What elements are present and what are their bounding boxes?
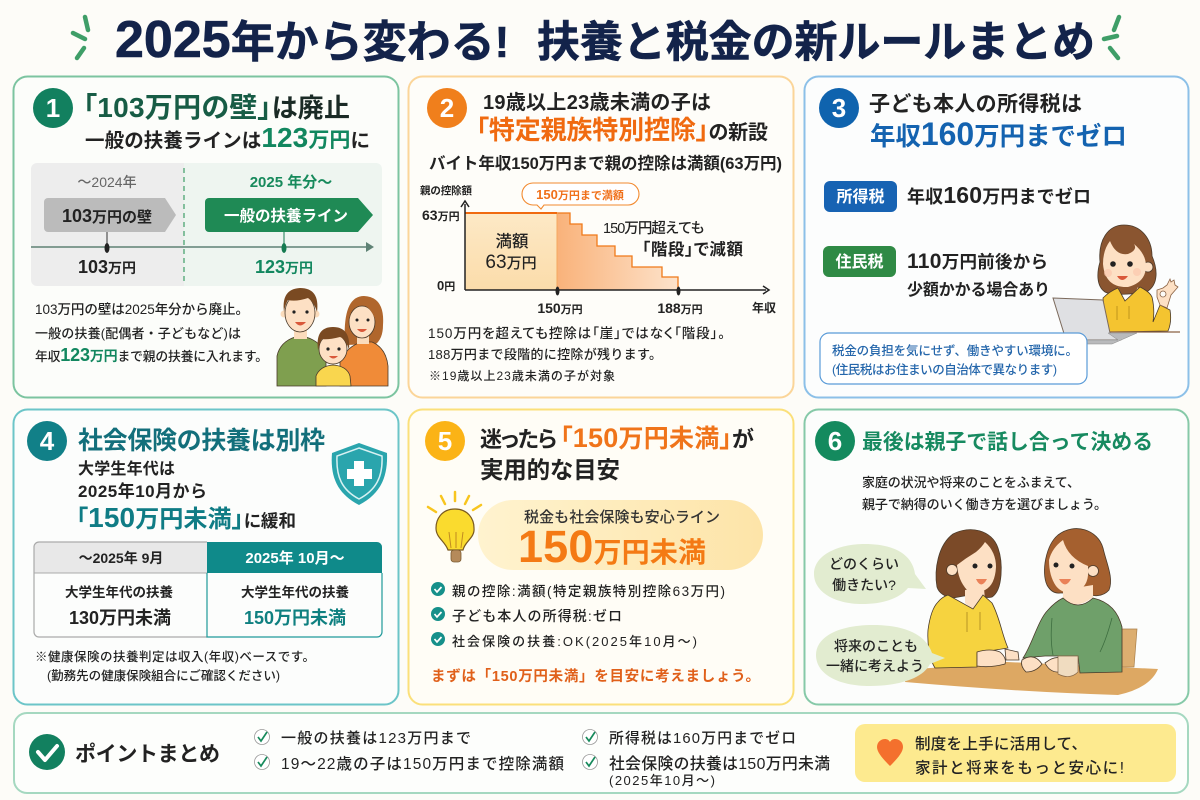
icon: light bulb bbox=[428, 492, 481, 562]
badge 2 bbox=[427, 88, 467, 128]
note box 3 bbox=[820, 333, 1087, 384]
summary list left: 一般の扶養は123万円まで bbox=[281, 730, 471, 747]
conclusion 5: まずは「150万円未満」を目安に考えましょう。 bbox=[431, 667, 760, 685]
step chart bbox=[420, 183, 776, 316]
summary list right: (2025年10月〜) bbox=[609, 773, 715, 788]
pill: 住民税 bbox=[823, 246, 896, 277]
subheading 2: 「特定親族特別控除」の新設 bbox=[476, 115, 768, 145]
heading 2: 19歳以上23歳未満の子は bbox=[483, 91, 711, 114]
checklist: 子ども本人の所得税:ゼロ bbox=[452, 608, 622, 624]
step chart: 63万円 bbox=[422, 207, 460, 223]
title: 2025年から変わる! bbox=[115, 11, 509, 69]
subheading 4: 「150万円未満」に緩和 bbox=[76, 502, 296, 533]
icon: check badge bbox=[29, 734, 65, 770]
comparison table: 2025年 10月〜 bbox=[245, 549, 345, 567]
body text 6: 親子で納得のいく働き方を選びましょう。 bbox=[862, 497, 1107, 512]
panel 4: 社会保険 bbox=[14, 410, 398, 704]
subheading 3: 年収160万円までゼロ bbox=[870, 116, 1127, 152]
comparison table bbox=[34, 542, 382, 637]
note box 3: (住民税はお住まいの自治体で異なります) bbox=[832, 362, 1057, 377]
heading 1: 「103万円の壁」は廃止 bbox=[83, 92, 350, 123]
comparison table: 130万円未満 bbox=[69, 608, 171, 628]
body text 1: 103万円の壁は2025年分から廃止。 bbox=[35, 301, 249, 317]
panel 6: 親子で話し合う bbox=[804, 410, 1188, 704]
badge 3: 3 bbox=[832, 93, 846, 123]
badge 2: 2 bbox=[440, 93, 454, 123]
summary list right bbox=[582, 730, 830, 788]
badge 1 bbox=[33, 88, 73, 128]
heading 5: 迷ったら bbox=[480, 427, 557, 452]
checklist: 親の控除:満額(特定親族特別控除63万円) bbox=[452, 583, 725, 599]
subheading 4: 大学生年代は bbox=[78, 459, 175, 478]
title: 扶養と税金の新ルールまとめ bbox=[537, 19, 1095, 67]
callout: message: 家計と将来をもっと安心に! bbox=[915, 759, 1124, 777]
body text 6: 家庭の状況や将来のことをふまえて、 bbox=[862, 475, 1080, 490]
body text 1: 一般の扶養(配偶者・子どもなど)は bbox=[35, 326, 241, 341]
text: 住民税: 110万円前後から bbox=[907, 250, 1048, 273]
callout: message bbox=[855, 724, 1176, 782]
timeline chart: 2025 年分〜 bbox=[250, 173, 332, 191]
step chart: 0円 bbox=[437, 278, 455, 293]
lead text 2: バイト年収150万円まで親の控除は満額(63万円) bbox=[429, 153, 782, 173]
arrow: 103万円の壁 bbox=[44, 198, 176, 232]
summary list right: 所得税は160万円までゼロ bbox=[609, 730, 796, 747]
step chart: 150万円超えても bbox=[603, 220, 705, 237]
summary list right: 社会保険の扶養は150万円未満 bbox=[609, 755, 830, 773]
subheading 4: 2025年10月から bbox=[78, 481, 207, 501]
step chart: 親の控除額 bbox=[420, 184, 472, 197]
arrow: 一般の扶養ライン: 一般の扶養ライン bbox=[224, 206, 348, 225]
step chart: 188万円 bbox=[657, 300, 703, 316]
timeline chart bbox=[31, 163, 382, 286]
step chart: 満額 bbox=[496, 232, 529, 251]
speech bubble: 将来のことも bbox=[816, 625, 945, 686]
callout: message: 制度を上手に活用して、 bbox=[915, 735, 1087, 753]
summary list left bbox=[254, 730, 564, 773]
note 4 bbox=[35, 649, 315, 683]
speech bubble: どのくらい bbox=[814, 544, 926, 604]
panel 3: 所得税 bbox=[804, 76, 1188, 398]
comparison table: 〜2025年 9月 bbox=[79, 550, 163, 566]
illustration: parent and child talking bbox=[905, 529, 1158, 695]
heading 5: が bbox=[732, 427, 754, 452]
icon: heart bbox=[877, 739, 903, 766]
heading 3: 子ども本人の所得税は bbox=[869, 93, 1082, 116]
text: 住民税: 少額かかる場合あり bbox=[907, 281, 1050, 299]
highlight pill bbox=[478, 500, 763, 572]
body text 6 bbox=[862, 475, 1107, 512]
highlight pill: 税金も社会保険も安心ライン bbox=[524, 509, 720, 526]
step chart: 150万円 bbox=[537, 300, 583, 316]
badge 6: 6 bbox=[828, 426, 842, 456]
speech bubble: どのくらい: 働きたい? bbox=[832, 577, 896, 593]
callout: 150万円まで満額 bbox=[522, 183, 639, 209]
note 4: ※健康保険の扶養判定は収入(年収)ベースです。 bbox=[35, 649, 315, 664]
summary list left: 19〜22歳の子は150万円まで控除満額 bbox=[281, 755, 564, 773]
body text 1: 年収123万円まで親の扶養に入れます。 bbox=[35, 345, 268, 365]
comparison table: 大学生年代の扶養 bbox=[241, 584, 349, 600]
pill: 所得税 bbox=[824, 181, 897, 212]
badge 4 bbox=[27, 421, 67, 461]
panel: ポイントまとめ bbox=[14, 713, 1188, 793]
step chart: 年収 bbox=[752, 300, 776, 315]
heading 5 bbox=[480, 423, 754, 483]
comparison table: 大学生年代の扶養 bbox=[65, 584, 173, 600]
body text 1 bbox=[35, 301, 268, 365]
step chart: 「階段」で減額 bbox=[642, 240, 744, 259]
panel 5: 150万円未満 bbox=[408, 410, 794, 704]
timeline chart: 〜2024年 bbox=[77, 174, 137, 190]
heading 5: 「150万円未満」 bbox=[560, 423, 732, 453]
heading 6: 最後は親子で話し合って決める bbox=[862, 431, 1153, 454]
subheading 4 bbox=[76, 459, 296, 533]
speech bubble: 将来のことも: 一緒に考えよう bbox=[826, 658, 924, 674]
icon: shield bbox=[332, 443, 387, 505]
arrow: 一般の扶養ライン bbox=[205, 198, 373, 232]
arrow: 103万円の壁: 103万円の壁 bbox=[62, 206, 152, 226]
body text 2: 188万円まで段階的に控除が残ります。 bbox=[428, 347, 662, 362]
body text 2 bbox=[428, 326, 725, 383]
timeline chart: 123万円 bbox=[255, 257, 313, 277]
heading 4: 社会保険の扶養は別枠 bbox=[78, 427, 325, 455]
speech bubble: どのくらい: どのくらい bbox=[829, 556, 899, 572]
illustration: family bbox=[277, 288, 388, 386]
highlight pill: 150万円未満 bbox=[518, 521, 706, 572]
callout: 150万円まで満額: 150万円まで満額 bbox=[536, 187, 624, 202]
body text 2: 150万円を超えても控除は「崖」ではなく「階段」。 bbox=[428, 326, 725, 341]
speech bubble: 将来のことも: 将来のことも bbox=[834, 638, 918, 654]
panel 1: 103万円の壁 bbox=[14, 76, 398, 398]
step chart: 63万円 bbox=[485, 252, 537, 273]
summary heading: ポイントまとめ bbox=[75, 743, 220, 766]
subheading 1: 一般の扶養ラインは123万円に bbox=[85, 122, 370, 153]
badge 5 bbox=[425, 421, 465, 461]
badge 4: 4 bbox=[40, 426, 55, 456]
heading 5: 実用的な目安 bbox=[480, 457, 620, 483]
checklist: 社会保険の扶養:OK(2025年10月〜) bbox=[452, 634, 697, 649]
badge 1: 1 bbox=[46, 93, 60, 123]
note box 3: 税金の負担を気にせず、働きやすい環境に。 bbox=[832, 343, 1078, 358]
checklist bbox=[431, 582, 725, 649]
badge 6 bbox=[815, 421, 855, 461]
pill: 所得税: 所得税 bbox=[836, 188, 885, 206]
illustration: woman with laptop bbox=[1053, 225, 1180, 344]
timeline chart: 103万円 bbox=[78, 257, 136, 277]
title bbox=[73, 11, 1119, 69]
text: 住民税 bbox=[907, 250, 1050, 299]
panel 2: 特定親族特別控除 bbox=[408, 76, 794, 398]
comparison table: 150万円未満 bbox=[244, 608, 346, 628]
badge 5: 5 bbox=[438, 426, 452, 456]
body text 2: ※19歳以上23歳未満の子が対象 bbox=[429, 368, 615, 383]
text: 所得税: 年収160万円までゼロ bbox=[907, 182, 1091, 208]
note 4: (勤務先の健康保険組合にご確認ください) bbox=[47, 668, 280, 683]
pill: 住民税: 住民税 bbox=[835, 252, 884, 271]
badge 3 bbox=[819, 88, 859, 128]
